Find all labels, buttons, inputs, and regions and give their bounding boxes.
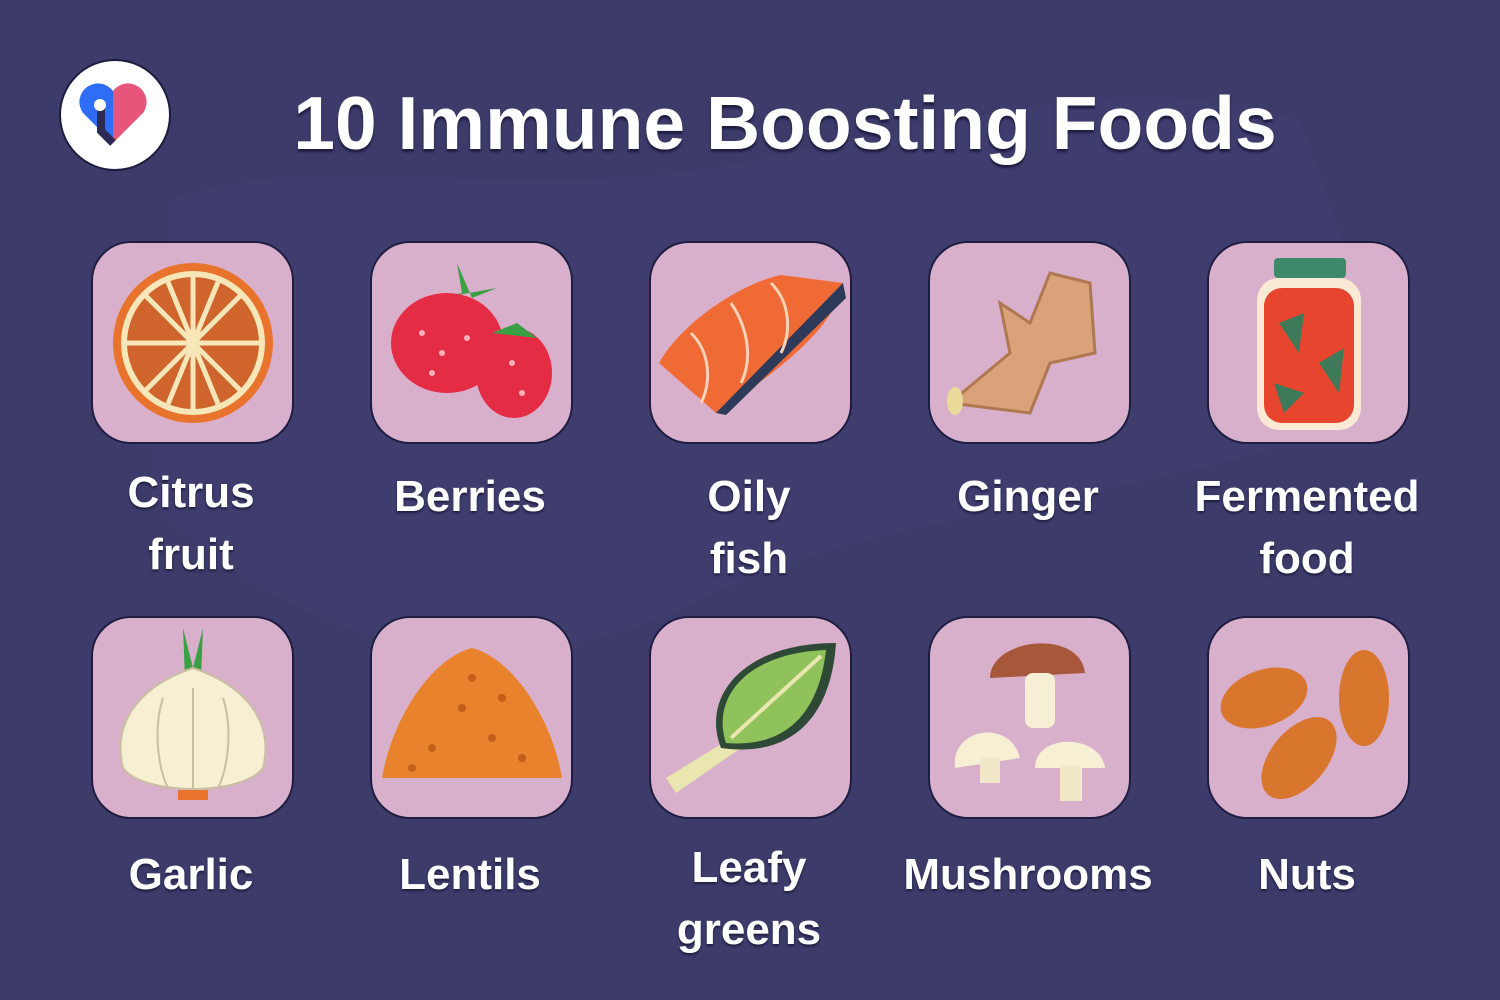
label: fermented: Fermented	[1195, 472, 1419, 521]
label: fermented: food	[1259, 534, 1355, 583]
label: fermented	[1195, 472, 1419, 583]
label: leafy greens	[677, 843, 821, 956]
label: citrus	[127, 468, 255, 579]
label: leafy greens: greens	[677, 905, 821, 954]
label: berries: Berries	[394, 472, 546, 521]
tile: mushrooms	[928, 616, 1131, 819]
label: nuts: Nuts	[1258, 850, 1356, 899]
tile: berries	[370, 241, 573, 444]
tile: fish	[649, 241, 852, 444]
label: leafy greens: Leafy	[692, 843, 806, 892]
logo	[59, 59, 171, 171]
tile: garlic	[91, 616, 294, 819]
label: oily fish: Oily	[707, 472, 791, 521]
title: 10 Immune Boosting Foods	[293, 81, 1277, 165]
label: citrus: fruit	[148, 530, 234, 579]
label: oily fish: fish	[710, 534, 788, 583]
tile: leafy greens	[649, 616, 852, 819]
label: ginger: Ginger	[957, 472, 1099, 521]
label: garlic: Garlic	[129, 850, 253, 899]
label: mushrooms: Mushrooms	[903, 850, 1153, 899]
label: citrus: Citrus	[127, 468, 255, 517]
tile: lentils	[370, 616, 573, 819]
tile: ginger	[928, 241, 1131, 444]
label: lentils: Lentils	[399, 850, 541, 899]
tile: nuts	[1207, 616, 1410, 819]
tile: fermented	[1207, 241, 1410, 444]
label: oily fish	[707, 472, 791, 583]
tile: citrus	[91, 241, 294, 444]
